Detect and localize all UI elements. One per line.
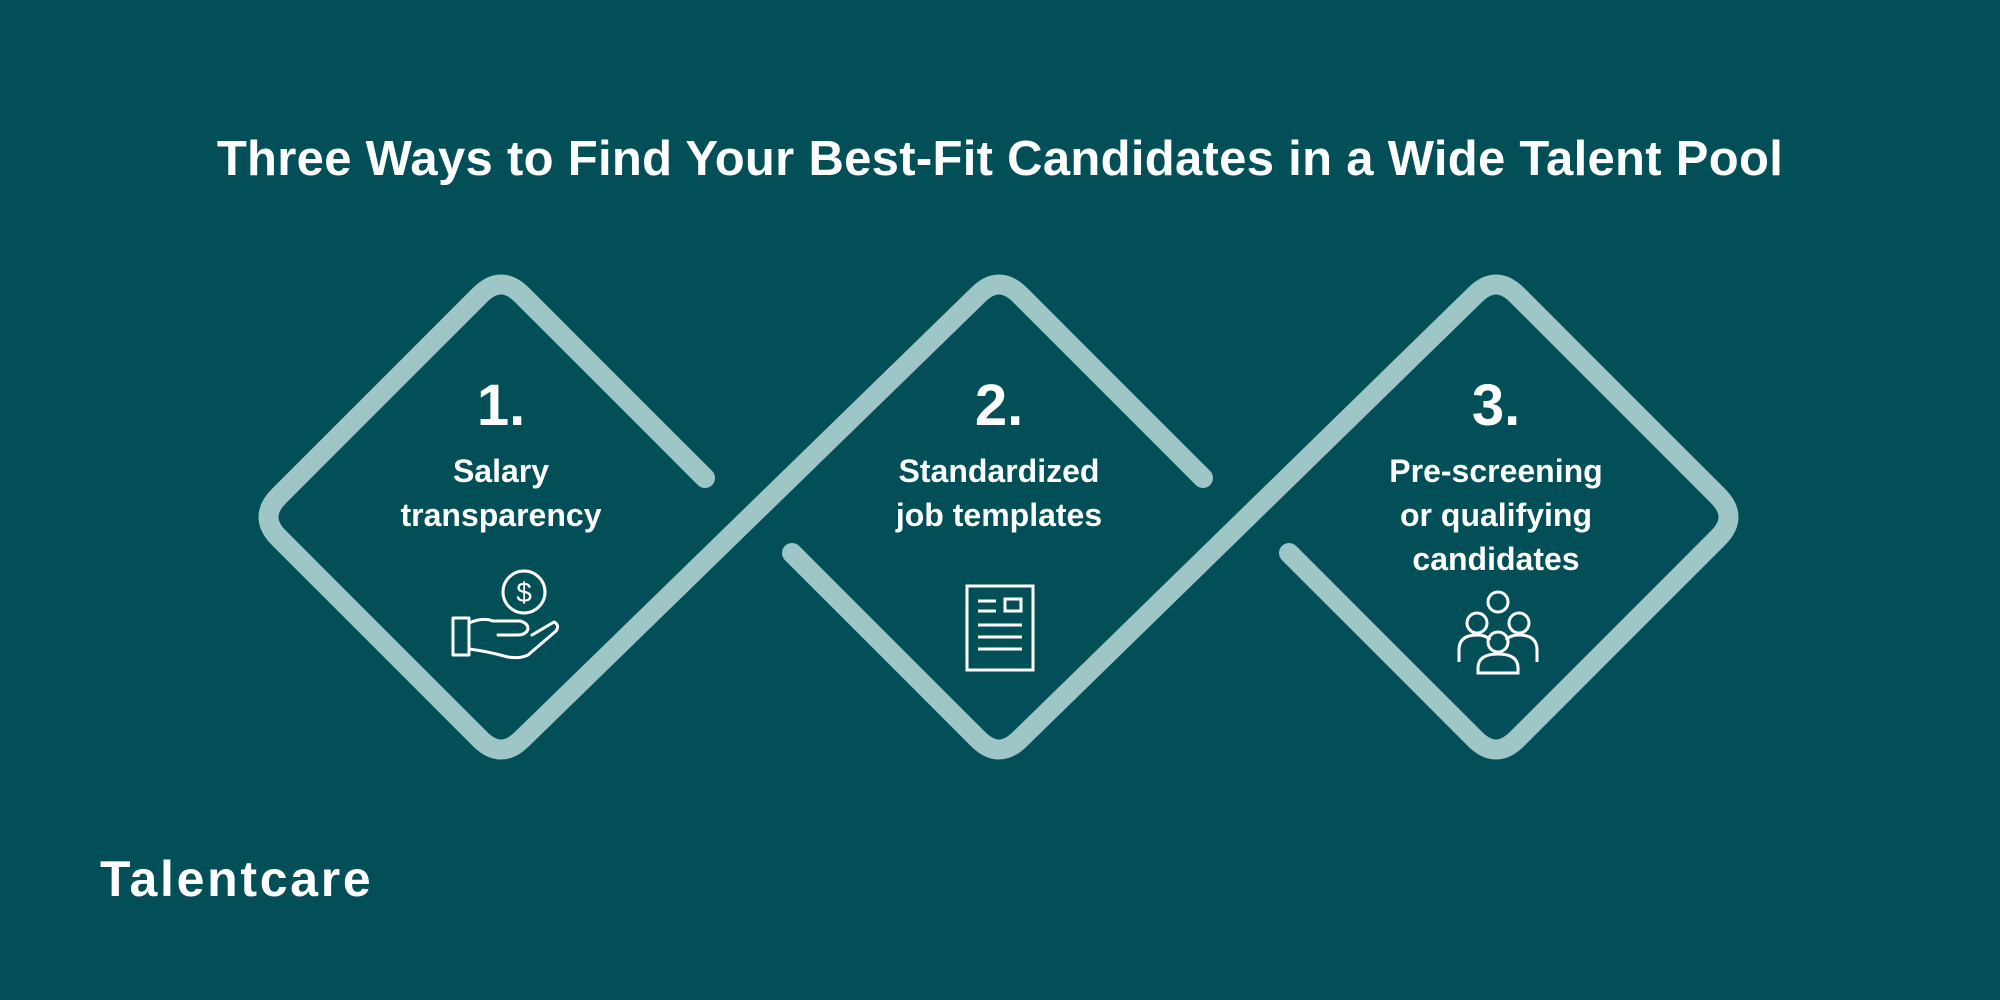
item 2: standardized job templates: Standardized — [899, 453, 1099, 489]
logo: Talentcare — [100, 851, 373, 907]
item 1: salary transparency: 1. — [477, 373, 525, 438]
item 2: standardized job templates: 2. — [975, 373, 1023, 438]
item 3: pre-screening: Pre-screening — [1389, 453, 1603, 489]
item 1: salary transparency — [400, 373, 602, 533]
item 3: pre-screening — [1389, 373, 1603, 577]
icon: hand with coin: $ — [516, 577, 532, 608]
item 3: pre-screening: or qualifying — [1400, 497, 1592, 533]
icon: document — [966, 584, 1034, 672]
item 1: salary transparency: Salary — [453, 453, 549, 489]
icon: hand with coin — [452, 570, 560, 660]
item 1: salary transparency: transparency — [400, 497, 601, 533]
title: Three Ways to Find Your Best-Fit Candidates in a Wide Talent Pool — [217, 132, 1783, 186]
item 2: standardized job templates — [895, 373, 1102, 533]
icon: group of people — [1458, 590, 1538, 674]
item 3: pre-screening: 3. — [1472, 373, 1520, 438]
item 2: standardized job templates: job templates — [896, 497, 1102, 533]
item 3: pre-screening: candidates — [1412, 541, 1580, 577]
